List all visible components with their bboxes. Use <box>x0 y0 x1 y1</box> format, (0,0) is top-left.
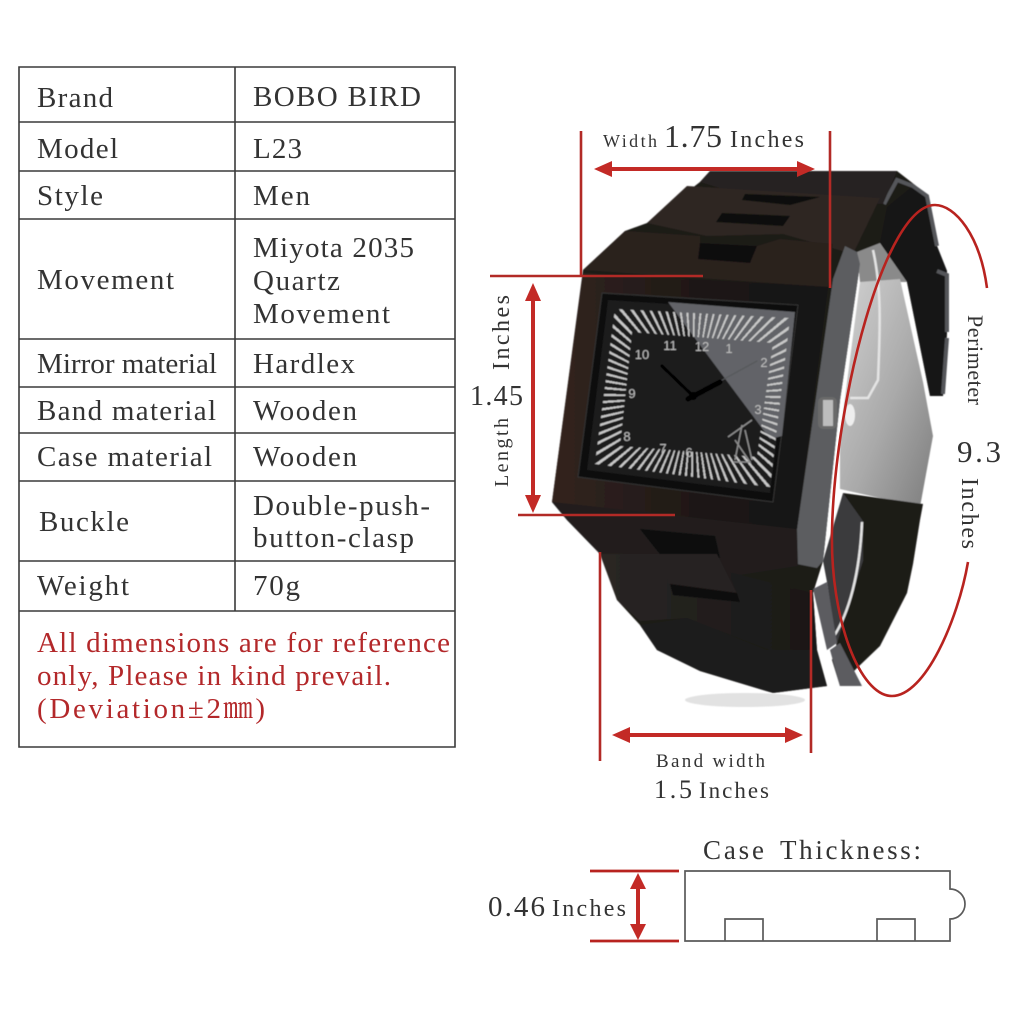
dial numerals: 9 <box>628 386 636 401</box>
band label: Inches <box>699 778 769 803</box>
row: model: Model <box>37 133 118 165</box>
row: brand: Brand <box>37 82 114 114</box>
length label: Length <box>491 418 513 487</box>
dial numerals: 7 <box>659 441 667 456</box>
disclaimer note: All dimensions are for reference <box>37 627 450 659</box>
row: brand <box>37 81 421 114</box>
perimeter label: 9.3 <box>957 434 1001 469</box>
top lug slot <box>698 243 757 263</box>
annotation: case length <box>470 276 703 515</box>
width arrow <box>594 161 815 177</box>
row: weight: Weight <box>37 570 129 602</box>
row: case material <box>37 441 358 473</box>
dial numerals: 2 <box>760 355 768 370</box>
dial radial ticks <box>594 308 790 488</box>
thickness value: Inches <box>552 896 626 922</box>
perimeter label <box>956 315 1001 549</box>
row: movement <box>37 232 414 330</box>
thickness heading: Thickness: <box>780 835 921 865</box>
band link 3 <box>640 618 827 693</box>
band centre piece <box>660 554 740 600</box>
row: buckle: button-clasp <box>253 522 414 554</box>
perimeter label: Inches <box>956 478 982 549</box>
dial <box>587 300 793 493</box>
length label: 1.45 <box>470 381 523 412</box>
row: mirror material: Mirror material <box>37 348 217 380</box>
disclaimer note: only, Please in kind prevail. <box>37 660 391 692</box>
row: case material: Case material <box>37 441 212 473</box>
row: movement: Quartz <box>253 265 340 297</box>
crown <box>818 397 855 429</box>
slots in rear links <box>716 194 820 226</box>
lower end plates <box>813 582 862 686</box>
row: band material: Band material <box>37 395 216 427</box>
band arrow <box>612 727 803 743</box>
dial numerals: 8 <box>623 429 631 444</box>
soft ground shadow <box>685 693 805 707</box>
case side plate <box>797 246 860 568</box>
band link 2 <box>600 554 817 650</box>
upper right band links <box>880 186 947 396</box>
watch photo <box>552 171 947 707</box>
row: band material: Wooden <box>253 395 358 427</box>
row: style <box>37 180 310 212</box>
band label: Band width <box>656 751 766 772</box>
watch silhouette <box>552 171 947 693</box>
length guide lines <box>490 276 703 515</box>
glass highlight <box>668 302 795 439</box>
row: band material <box>37 395 358 427</box>
width label: 1.75 <box>664 118 722 154</box>
annotation: case width <box>581 118 830 288</box>
dial numerals: 12 <box>695 339 709 354</box>
width guide lines <box>581 131 830 288</box>
disclaimer note: (Deviation±2㎜) <box>37 693 265 725</box>
rear case shading <box>857 243 907 282</box>
row: style: Men <box>253 180 310 212</box>
thickness guide lines <box>590 871 679 941</box>
dial numerals <box>623 338 768 460</box>
row: movement: Movement <box>37 264 174 296</box>
row: model <box>37 133 302 165</box>
lower case slot <box>640 529 720 558</box>
glass bezel <box>578 293 798 502</box>
band guide lines <box>600 552 811 761</box>
row: mirror material <box>37 348 356 380</box>
length arrow <box>525 283 541 513</box>
lower clasp wire <box>830 522 862 642</box>
row: movement: Miyota 2035 <box>253 232 414 264</box>
dial numerals: 11 <box>663 338 677 353</box>
dial numerals: 10 <box>635 347 649 362</box>
band gap behind wire <box>823 493 866 650</box>
row: movement: Movement <box>253 298 390 330</box>
width label <box>603 118 804 154</box>
band label <box>654 751 769 804</box>
thickness heading: Case <box>703 835 764 865</box>
band label: 1.5 <box>654 775 692 804</box>
thickness arrow <box>630 873 646 940</box>
panel: specification table <box>19 67 455 747</box>
annotation: band width <box>600 552 811 804</box>
annotation: perimeter <box>832 205 1001 696</box>
row: buckle <box>39 490 430 554</box>
perimeter ellipse <box>832 205 987 696</box>
top band link <box>700 171 897 204</box>
lower case part <box>552 502 798 575</box>
row: case material: Wooden <box>253 441 358 473</box>
width label: Inches <box>730 127 804 153</box>
row: style: Style <box>37 180 103 212</box>
row: mirror material: Hardlex <box>253 348 356 380</box>
row: buckle: Double-push- <box>253 490 430 522</box>
band slot <box>670 584 740 602</box>
panel: case thickness <box>488 835 965 941</box>
thickness heading <box>703 835 921 865</box>
disclaimer note <box>37 627 450 725</box>
case top surface <box>583 231 833 287</box>
thickness value: 0.46 <box>488 891 545 923</box>
row: model: L23 <box>253 133 302 165</box>
link edge rims <box>884 180 947 394</box>
thickness value <box>488 891 626 923</box>
table grid <box>19 67 455 747</box>
dial numerals: 3 <box>754 402 762 417</box>
length label: Inches <box>489 295 515 370</box>
lower right band links <box>832 493 923 686</box>
dial numerals: 6 <box>685 445 693 460</box>
width label: Width <box>603 131 657 151</box>
case profile outline <box>685 871 965 941</box>
bird logo <box>728 420 752 462</box>
perimeter label: Perimeter <box>963 315 988 406</box>
length label <box>470 295 523 487</box>
second band link <box>647 186 880 254</box>
case front frame <box>552 273 828 529</box>
row: weight: 70g <box>253 570 300 602</box>
clasp wire <box>850 250 880 398</box>
watch hands <box>662 361 757 400</box>
row: brand: BOBO BIRD <box>253 81 421 113</box>
row: buckle: Buckle <box>39 506 129 538</box>
clasp steel <box>840 279 933 507</box>
dial numerals: 1 <box>725 341 733 356</box>
row: weight <box>37 570 300 602</box>
